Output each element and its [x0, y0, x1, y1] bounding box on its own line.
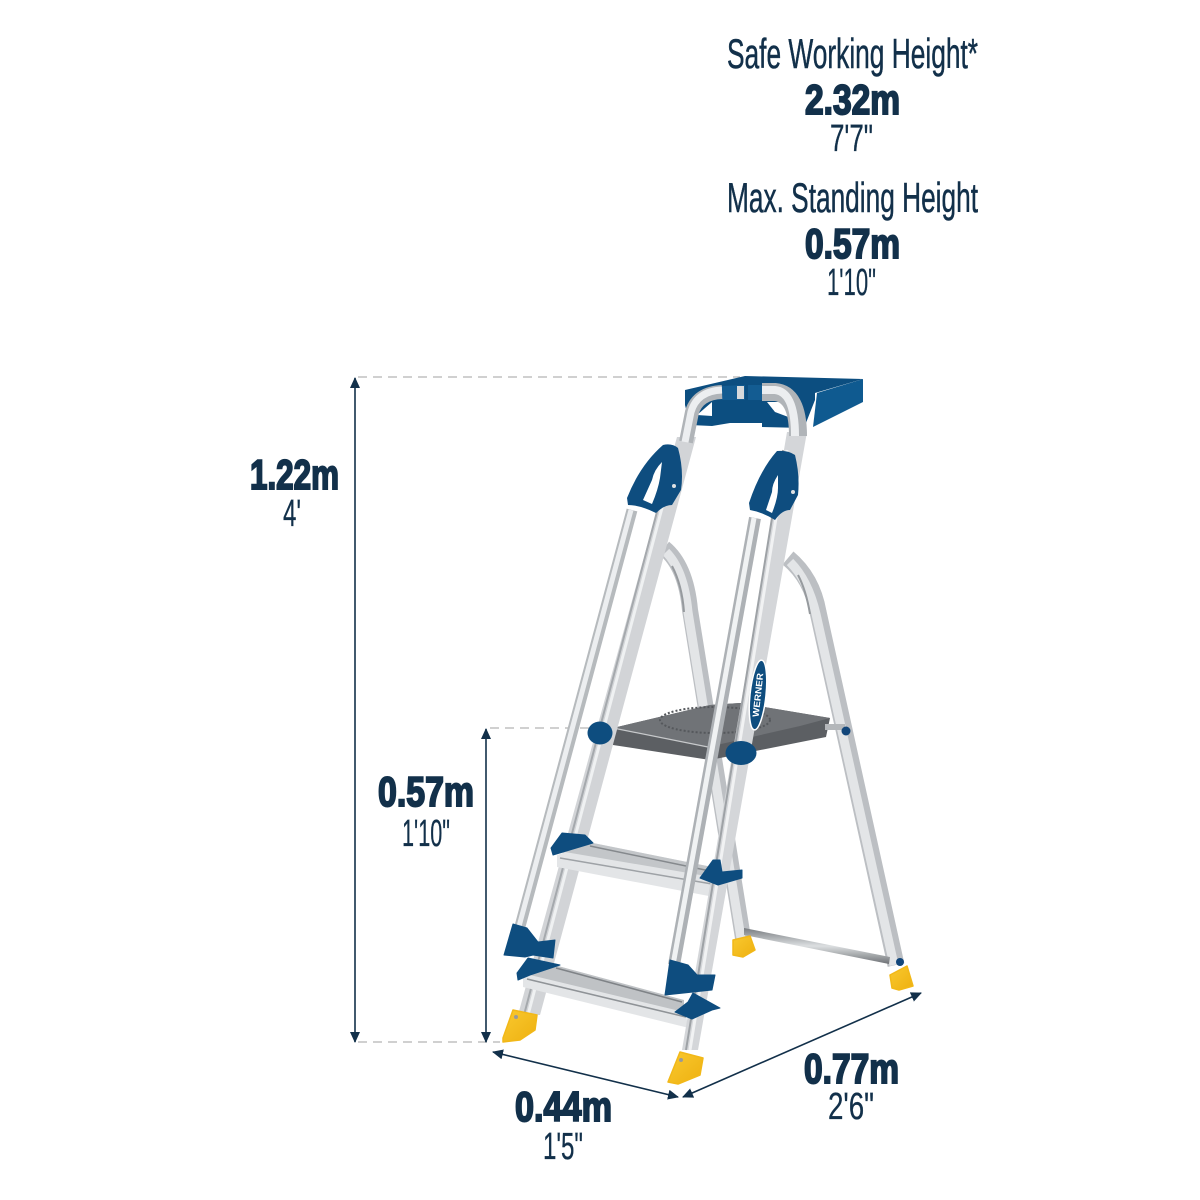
heading: safe working height — [727, 30, 978, 160]
label: overall height — [250, 451, 339, 535]
illustration: step ladder — [503, 376, 913, 1084]
dimension: depth arrow — [683, 993, 921, 1097]
dimension: overall height arrow — [355, 377, 740, 1042]
heading: max standing height: Max. Standing Height — [727, 174, 978, 221]
label: overall height: 1.22m — [250, 451, 339, 498]
heading: safe working height: 2.32m — [805, 76, 900, 123]
label: standing height — [378, 768, 474, 855]
label: overall height: 4' — [283, 493, 301, 535]
label: standing height: 0.57m — [378, 768, 474, 815]
label: width: 1'5" — [543, 1126, 583, 1168]
knobs — [588, 722, 756, 765]
heading: max standing height: 0.57m — [805, 220, 900, 267]
tray — [685, 376, 863, 428]
logo — [746, 659, 770, 731]
step brackets — [504, 833, 742, 1019]
front frame rails, right side — [673, 386, 807, 1050]
label: depth: 0.77m — [804, 1045, 899, 1092]
front frame rails, left side — [514, 390, 722, 1015]
front feet — [503, 1010, 703, 1084]
handles — [627, 444, 799, 520]
heading: max standing height — [727, 174, 978, 304]
rear feet — [733, 936, 913, 990]
rear legs — [664, 548, 896, 965]
upper step — [557, 843, 714, 897]
heading: max standing height: 1'10" — [827, 262, 876, 304]
heading: safe working height: 7'7" — [830, 118, 873, 160]
label: width: 0.44m — [515, 1083, 612, 1130]
lower step — [523, 966, 689, 1028]
label: standing height: 1'10" — [402, 813, 450, 855]
dimension: standing height arrow — [485, 729, 487, 1042]
label: width — [515, 1083, 612, 1168]
label: depth — [804, 1045, 899, 1128]
logo: WERNER — [751, 672, 765, 717]
heading: safe working height: Safe Working Height* — [727, 30, 978, 77]
label: depth: 2'6" — [828, 1086, 874, 1128]
platform — [613, 703, 850, 760]
dimension: width arrow — [493, 1052, 678, 1097]
rear cross rod — [744, 928, 890, 964]
